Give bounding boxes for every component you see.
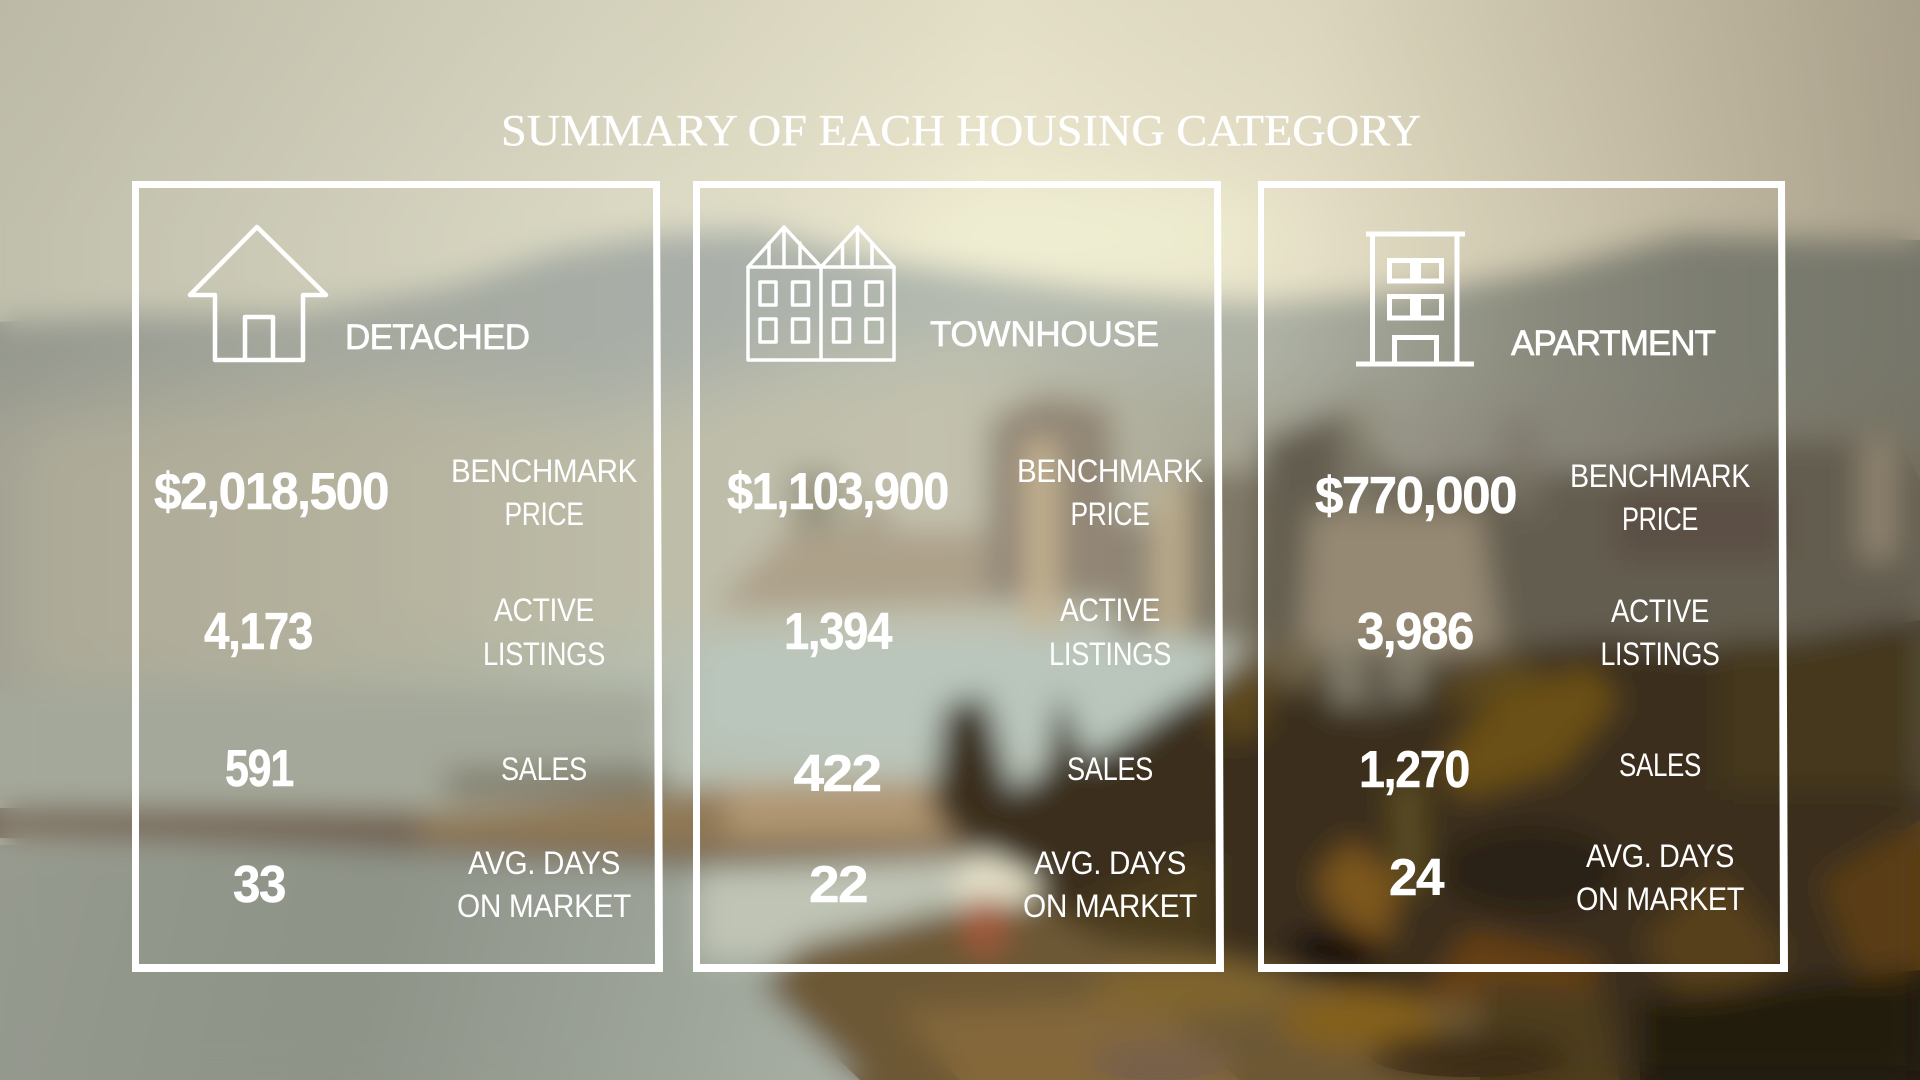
stat: average days on market bbox=[233, 845, 631, 924]
stat: benchmark price: BENCHMARK bbox=[451, 453, 637, 489]
stat: average days on market bbox=[1389, 838, 1744, 917]
stat: active listings bbox=[1357, 593, 1720, 672]
stat: benchmark price: BENCHMARK bbox=[1017, 453, 1203, 489]
stat: average days on market: AVG. DAYS bbox=[1586, 838, 1734, 874]
title: SUMMARY OF EACH HOUSING CATEGORY bbox=[501, 106, 1421, 155]
stat: benchmark price bbox=[1315, 458, 1750, 537]
stat: sales: SALES bbox=[501, 751, 587, 787]
stat: benchmark price: $1,103,900 bbox=[727, 463, 948, 521]
stat: benchmark price bbox=[154, 453, 637, 532]
stat: average days on market: 24 bbox=[1389, 849, 1445, 907]
icon: townhouses bbox=[748, 227, 894, 360]
stat: active listings: ACTIVE bbox=[1060, 592, 1160, 628]
stat: active listings: ACTIVE bbox=[1611, 593, 1709, 629]
stat: sales bbox=[794, 745, 1153, 803]
stat: active listings: 4,173 bbox=[204, 603, 312, 661]
panel: detached bbox=[132, 181, 663, 972]
stat: sales: SALES bbox=[1619, 747, 1701, 783]
stat: active listings: 3,986 bbox=[1357, 603, 1474, 661]
stat: sales bbox=[225, 740, 587, 798]
icon: apartment building bbox=[1356, 234, 1474, 364]
stat: average days on market: ON MARKET bbox=[457, 888, 631, 924]
stat: average days on market: 33 bbox=[233, 856, 286, 914]
stat: active listings: LISTINGS bbox=[1600, 636, 1720, 672]
icon: house bbox=[190, 227, 326, 360]
heading: detached: DETACHED bbox=[345, 318, 530, 357]
stat: active listings bbox=[784, 592, 1171, 672]
stat: average days on market: ON MARKET bbox=[1576, 881, 1744, 917]
stat: average days on market bbox=[809, 845, 1197, 924]
stat: active listings: ACTIVE bbox=[494, 592, 594, 628]
panel: apartment bbox=[1258, 181, 1788, 972]
stat: benchmark price bbox=[727, 453, 1203, 532]
heading: townhouse: TOWNHOUSE bbox=[930, 315, 1159, 354]
stat: benchmark price: PRICE bbox=[1622, 501, 1698, 537]
stat: sales: 1,270 bbox=[1359, 741, 1469, 799]
stat: benchmark price: PRICE bbox=[504, 496, 584, 532]
stat: benchmark price: BENCHMARK bbox=[1570, 458, 1750, 494]
stat: sales: 422 bbox=[794, 745, 880, 803]
stat: active listings: LISTINGS bbox=[483, 636, 605, 672]
stat: benchmark price: $770,000 bbox=[1315, 467, 1516, 525]
stat: active listings: LISTINGS bbox=[1049, 636, 1171, 672]
stat: sales: 591 bbox=[225, 740, 293, 798]
stat: benchmark price: PRICE bbox=[1070, 496, 1150, 532]
stat: sales bbox=[1359, 741, 1701, 799]
stat: average days on market: ON MARKET bbox=[1023, 888, 1197, 924]
stat: benchmark price: $2,018,500 bbox=[154, 463, 388, 521]
stat: active listings bbox=[204, 592, 605, 672]
stat: average days on market: AVG. DAYS bbox=[468, 845, 620, 881]
stat: average days on market: 22 bbox=[809, 856, 867, 914]
panel: townhouse bbox=[693, 181, 1224, 972]
stat: active listings: 1,394 bbox=[784, 603, 892, 661]
stat: sales: SALES bbox=[1067, 751, 1153, 787]
stat: average days on market: AVG. DAYS bbox=[1034, 845, 1186, 881]
heading: apartment: APARTMENT bbox=[1511, 324, 1716, 363]
